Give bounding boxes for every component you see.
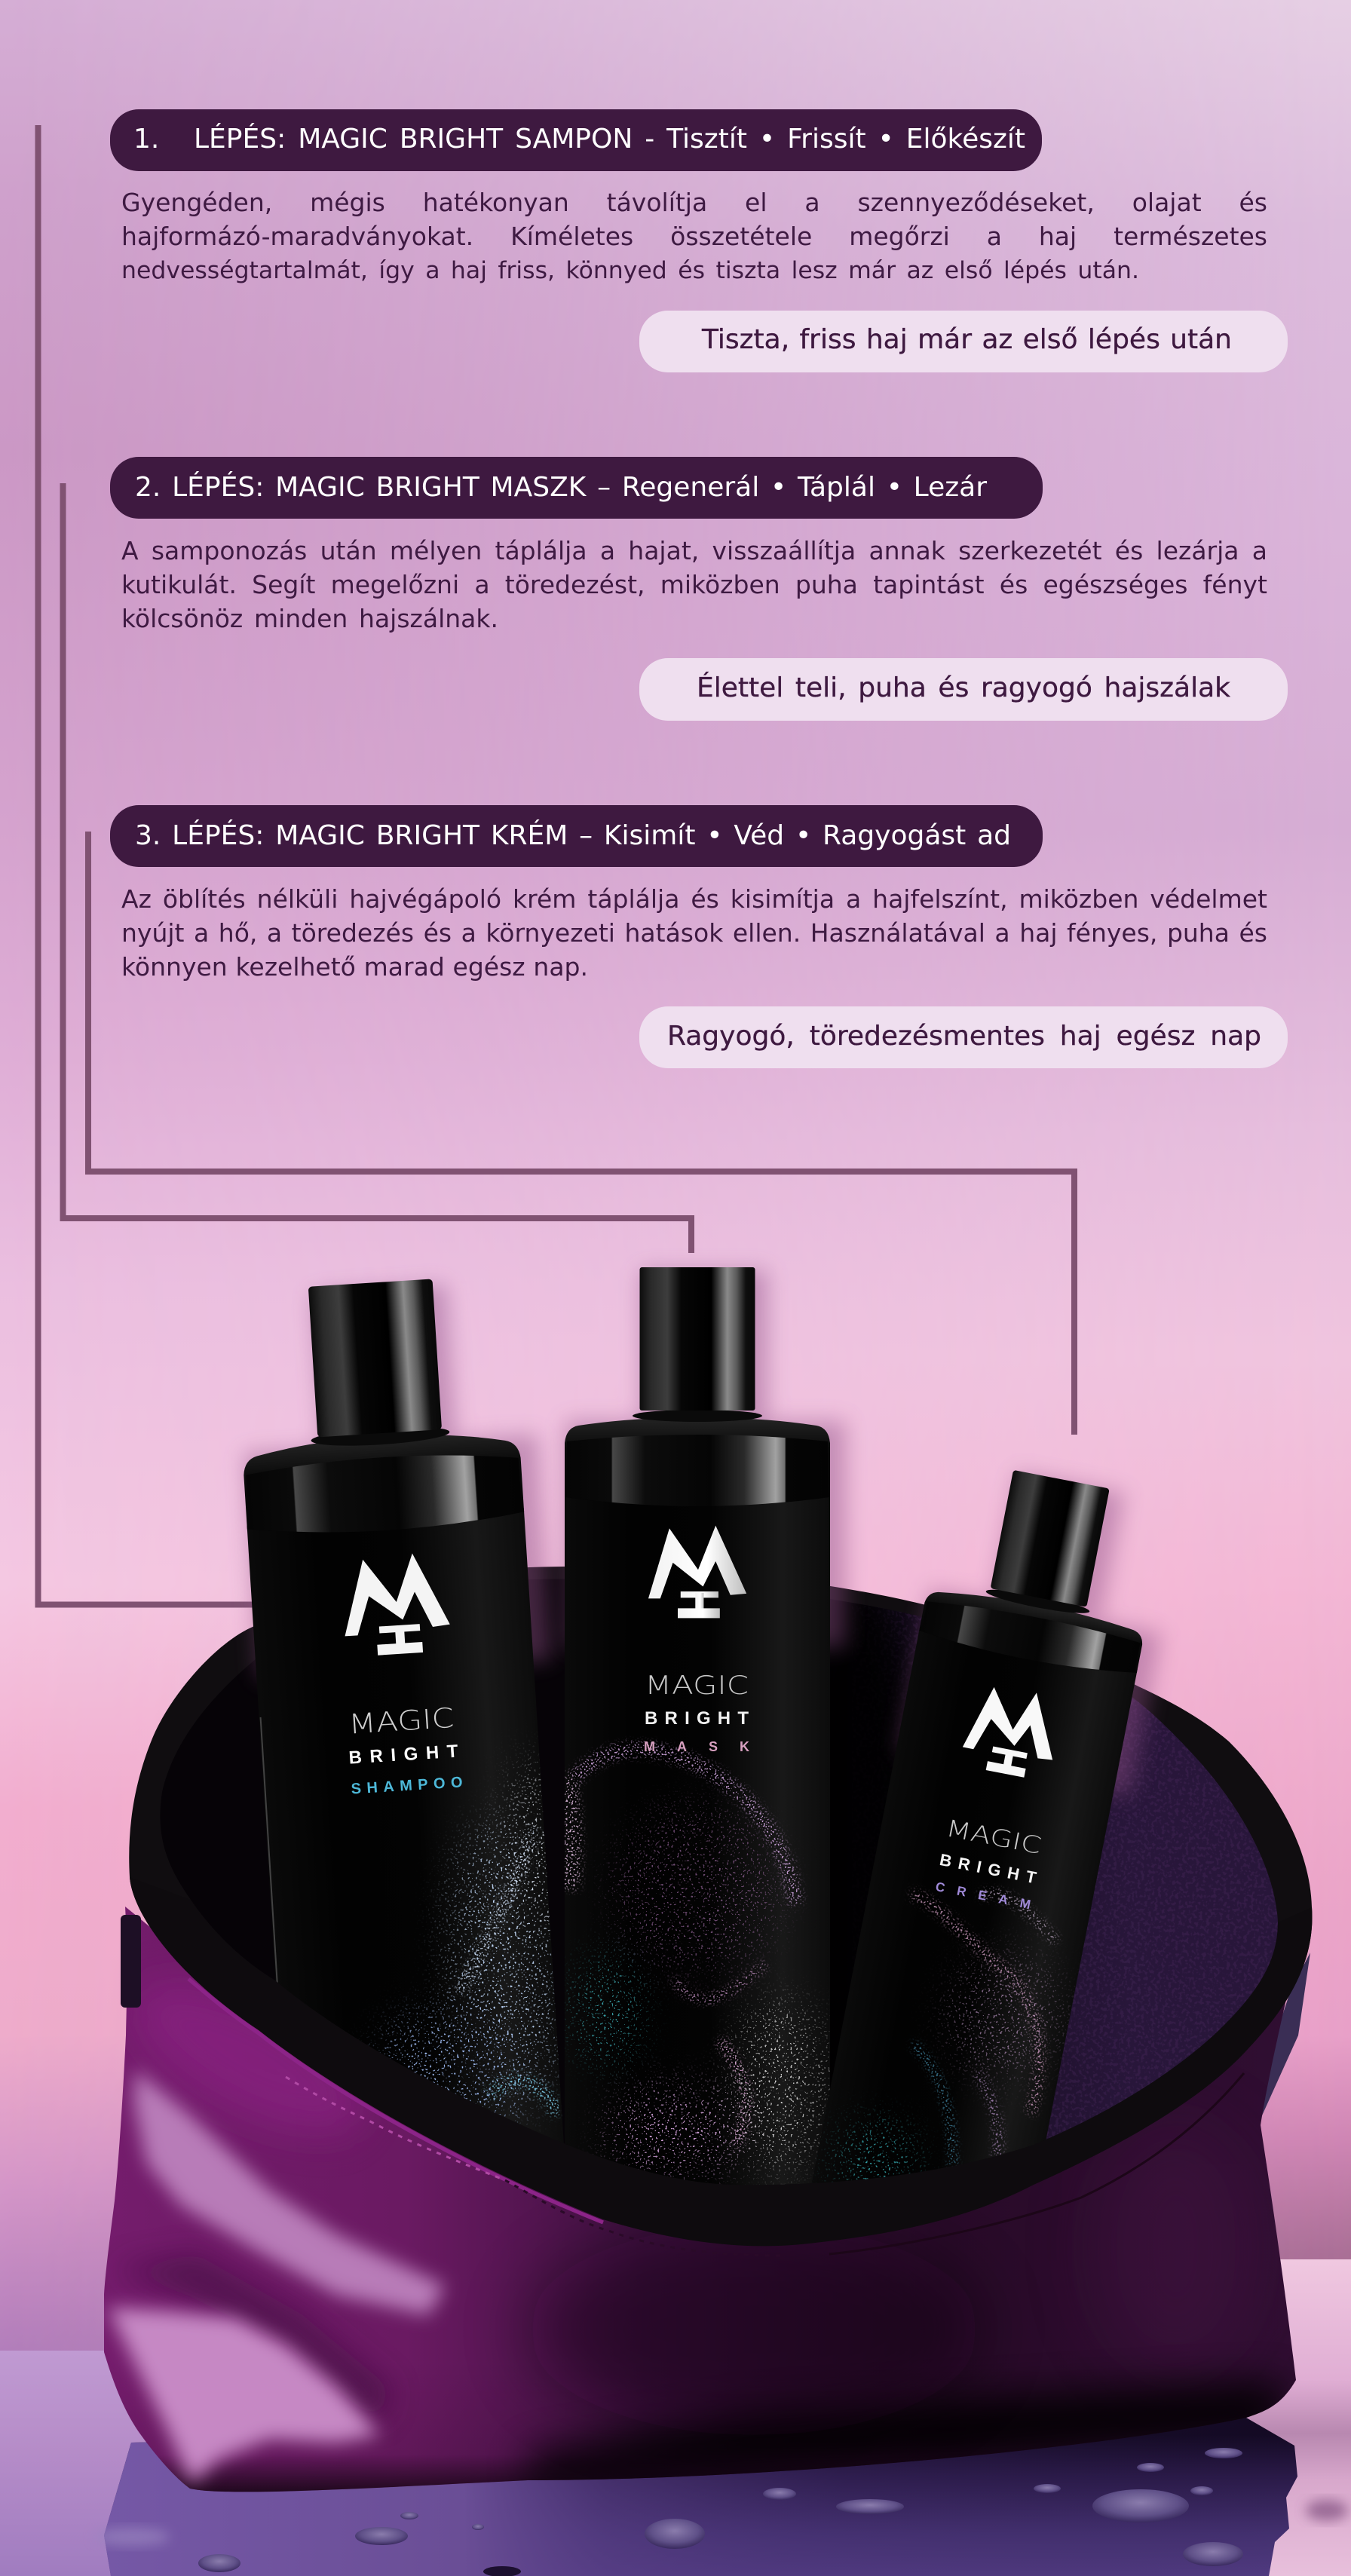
body text: step 2 <box>121 536 1267 633</box>
body text: step 1 <box>121 188 1267 284</box>
panel: step 3 <box>110 805 1288 1068</box>
callout text: step 1: Tiszta, friss haj már az első lépés után <box>702 324 1232 355</box>
bottle label: cream: MAGIC <box>944 1815 1043 1860</box>
bag front: leather body with highlights <box>98 1900 1310 2503</box>
heading: step 3: 3. LÉPÉS: MAGIC BRIGHT KRÉM – Kisimít • Véd • Ragyogást ad <box>135 820 1011 851</box>
heading pill: step 3 <box>110 805 1043 867</box>
bottle label: shampoo: SHAMPOO <box>351 1774 463 1798</box>
bottle label: mask: MASK <box>644 1739 749 1754</box>
body text: step 3: nyújt a hő, a töredezés és a környezeti hatások ellen. Használatával a haj fényes, puha és <box>121 918 1267 948</box>
body text: step 2: A samponozás után mélyen táplálja a hajat, visszaállítja annak szerkezetét és lezárja a <box>121 536 1267 565</box>
logo <box>959 1681 1065 1782</box>
bag back: rim and interior <box>129 1567 1312 2144</box>
bottle mask <box>565 1267 846 2195</box>
bottle label: mask: MAGIC <box>645 1671 749 1701</box>
bag front: black zipper rim <box>130 1877 1312 2246</box>
connector line: step 1 to shampoo <box>38 125 256 1604</box>
bottle label: mask: BRIGHT <box>645 1708 749 1729</box>
body text: step 1: Gyengéden, mégis hatékonyan távolítja el a szennyeződéseket, olajat és <box>121 188 1267 217</box>
body text: step 1: nedvességtartalmát, így a haj friss, könnyed és tiszta lesz már az első lépés után. <box>121 257 1139 284</box>
callout text: step 2: Élettel teli, puha és ragyogó hajszálak <box>697 672 1230 703</box>
callout text: step 3: Ragyogó, töredezésmentes haj egész nap <box>667 1021 1261 1052</box>
bottle label: mask <box>644 1671 749 1754</box>
callout pill: step 3 <box>639 1006 1288 1068</box>
floor surface <box>0 2259 1351 2576</box>
bottle label: shampoo <box>346 1702 463 1798</box>
body text: step 1: hajformázó-maradványokat. Kíméletes összetétele megőrzi a haj természetes <box>121 222 1267 251</box>
body text: step 2: kutikulát. Segít megelőzni a töredezést, miközben puha tapintást és egészséges fényt <box>121 570 1267 599</box>
bottle label: cream: CREAM <box>934 1879 1032 1912</box>
callout pill: step 2 <box>639 658 1288 721</box>
bottle label: shampoo: BRIGHT <box>348 1741 459 1769</box>
heading: step 2: 2. LÉPÉS: MAGIC BRIGHT MASZK – Regenerál • Táplál • Lezár <box>135 472 987 503</box>
body text: step 3: könnyen kezelhető marad egész nap. <box>121 952 588 982</box>
bottle shampoo <box>235 1276 564 2143</box>
bottle shadow <box>899 1460 1187 1796</box>
heading pill: step 2 <box>110 457 1043 519</box>
bottle cream <box>814 1466 1168 2182</box>
panel: step 2 <box>110 457 1288 721</box>
panel: step 1 <box>110 109 1288 372</box>
callout pill: step 1 <box>639 311 1288 372</box>
logo <box>648 1526 746 1618</box>
bottle shadow <box>565 1270 846 1647</box>
body text: step 3: Az öblítés nélküli hajvégápoló krém táplálja és kisimítja a hajfelszínt, miközben védelmet <box>121 884 1267 914</box>
connector line: step 2 to mask <box>63 483 691 1253</box>
heading pill: step 1 <box>110 109 1042 171</box>
logo <box>340 1551 452 1657</box>
body text: step 3 <box>121 884 1267 982</box>
bottle shadow <box>234 1279 552 1679</box>
connector line: step 3 to cream <box>88 832 1074 1435</box>
bottle label: shampoo: MAGIC <box>348 1703 455 1741</box>
body text: step 2: kölcsönöz minden hajszálnak. <box>121 604 498 633</box>
bottle label: cream <box>934 1815 1043 1912</box>
heading: step 1: LÉPÉS: MAGIC BRIGHT SAMPON - Tisztít • Frissít • Előkészít <box>194 124 1025 155</box>
step 1 number: 1. <box>133 124 159 155</box>
floor reflection puddle with droplets <box>94 2418 1348 2576</box>
bottle label: cream: BRIGHT <box>938 1850 1038 1887</box>
bag stitching and side tab <box>121 1915 1244 2256</box>
